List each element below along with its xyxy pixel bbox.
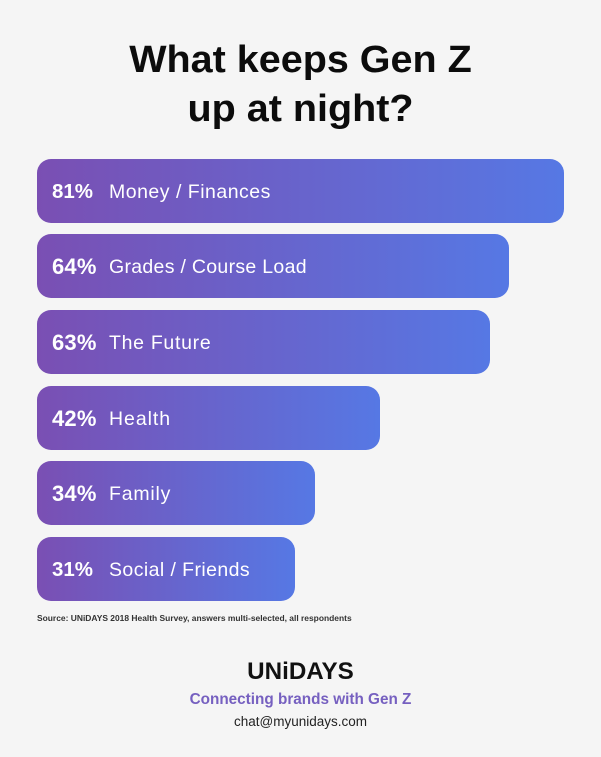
bar chart: [37, 159, 564, 601]
bar: The Future 63%: 63%: [52, 330, 97, 355]
bar: Grades / Course Load 64%: [37, 234, 509, 298]
bar: Health 42%: Health: [109, 408, 171, 430]
bar: Money / Finances 81%: [37, 159, 564, 223]
bar: Social / Friends 31%: [37, 537, 295, 601]
bar: Grades / Course Load 64%: Grades / Course Load: [109, 256, 307, 278]
bar: Money / Finances 81%: Money / Finances: [109, 181, 271, 203]
bar: Money / Finances 81%: 81%: [52, 180, 93, 203]
bar: Social / Friends 31%: 31%: [52, 558, 93, 581]
bar: The Future 63%: [37, 310, 490, 374]
bar: Family 34%: 34%: [52, 481, 97, 506]
bar: Grades / Course Load 64%: 64%: [52, 254, 97, 279]
bar: Health 42%: 42%: [52, 406, 97, 431]
title: up at night?: [187, 88, 414, 130]
tagline: Connecting brands with Gen Z: [190, 691, 411, 708]
title: What keeps Gen Z: [129, 39, 472, 81]
logo: UNiDAYS: UNiDAYS: [247, 658, 354, 685]
contact email: chat@myunidays.com: [234, 714, 367, 729]
bar: Health 42%: [37, 386, 380, 450]
bar: Family 34%: Family: [109, 483, 171, 505]
bar: Family 34%: [37, 461, 315, 525]
title: [129, 39, 472, 130]
source note: Source: UNiDAYS 2018 Health Survey, answers multi-selected, all respondents: [37, 613, 352, 623]
bar: Social / Friends 31%: Social / Friends: [109, 559, 250, 581]
bar: The Future 63%: The Future: [109, 332, 211, 354]
